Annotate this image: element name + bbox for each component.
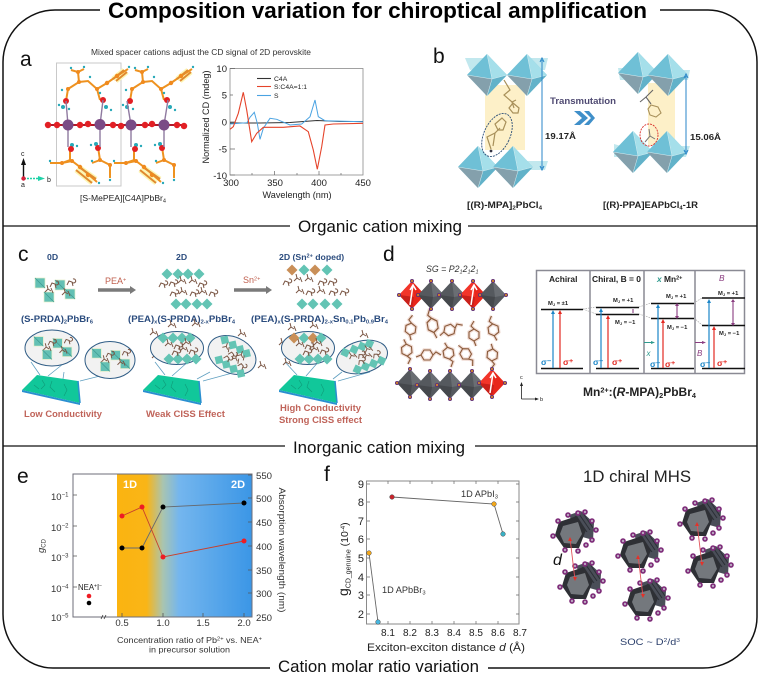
heading: organic cation mixing: Organic cation mixing (298, 217, 462, 236)
letter b: b (433, 45, 445, 68)
left distance arrow (540, 58, 544, 170)
scatter chart: (10 (339, 531, 351, 549)
stage labels (47, 252, 344, 262)
energy level diagram: B (697, 349, 703, 358)
formula Sn doped: 2-x (325, 320, 334, 326)
energy level diagram: = +1 (673, 294, 687, 300)
scatter chart: 3 (422, 590, 426, 596)
crystal axes: c (21, 151, 25, 158)
dual axis chart: 10 (51, 613, 62, 624)
right formula: 4 (679, 206, 684, 212)
space group label: 2 (462, 264, 468, 274)
scatter chart: 1D APbBr (382, 585, 422, 595)
energy level diagram: = −1 (622, 320, 636, 326)
dual axis chart: 300 (256, 589, 272, 600)
CD line chart (201, 64, 371, 201)
film schematic right (279, 321, 391, 405)
dual axis chart: −3 (62, 554, 69, 560)
formula: Mn (583, 387, 600, 399)
scatter chart: CD_genuine (346, 549, 352, 588)
axes (520, 375, 543, 403)
stage labels: 2+ (307, 254, 313, 260)
CD line chart: S (274, 93, 279, 100)
dual axis chart: 0.5 (115, 618, 129, 629)
formula 0D: 6 (90, 320, 93, 326)
film schematic middle (143, 319, 266, 405)
dual axis chart: 10 (51, 523, 62, 534)
letter e: e (17, 465, 29, 488)
left formula: [(R)-MPA] (467, 200, 508, 210)
caption high conductivity strong CISS (279, 403, 362, 425)
left structure (458, 54, 548, 188)
formula 2D: 4 (232, 320, 236, 326)
formula 0D: (S-PRDA) (21, 314, 63, 324)
dual axis chart: 2+ (217, 636, 224, 642)
right formula: -1R (683, 200, 699, 210)
structure formula: [S-MePEA][C4A]PbBr (80, 193, 162, 203)
CD line chart: 350 (267, 178, 283, 189)
Sn doped structure (283, 264, 349, 310)
PEA arrow: + (123, 278, 126, 284)
crystal structure (45, 63, 194, 186)
energy level diagram: J (671, 295, 673, 300)
formula Sn doped: 0.9 (366, 320, 374, 326)
energy level diagram: σ⁻ (700, 359, 711, 369)
Sn arrow (234, 275, 272, 294)
formula: 2 (659, 393, 663, 400)
energy level diagram: J (553, 302, 555, 307)
right distance label: 15.06Å (690, 132, 721, 142)
energy level diagram: σ⁻ (650, 359, 661, 369)
left formula: 2 (512, 206, 516, 212)
Sn arrow: Sn (243, 275, 254, 285)
formula 0D: 2 (64, 320, 67, 326)
scatter chart: ) (339, 522, 351, 526)
transmutation label: Transmutation (550, 96, 616, 106)
formula Sn doped: (S-PRDA) (281, 314, 325, 324)
space group label: 1 (460, 270, 463, 276)
dual axis chart: Concentration ratio of Pb (117, 635, 209, 645)
film schematic left (22, 330, 135, 405)
Sn arrow: 2+ (254, 276, 260, 282)
dual axis chart: 10 (51, 584, 62, 595)
right structure (613, 52, 690, 173)
scatter chart: -4 (341, 525, 347, 531)
scatter chart: 3 (495, 494, 498, 500)
MHS octahedra pairs (551, 498, 733, 621)
CD line chart: 5 (222, 90, 227, 102)
SOC equation: SOC ~ D (620, 637, 658, 648)
2D structure (159, 268, 218, 310)
left formula: PbCl (516, 200, 539, 210)
formula 2D: x (154, 320, 158, 326)
dual axis chart: in precursor solution (149, 644, 230, 654)
energy level diagram: σ⁺ (665, 359, 676, 369)
axes: c (520, 375, 523, 381)
formula Sn doped: Pb (353, 314, 366, 324)
caption high conductivity strong CISS: High Conductivity (280, 403, 362, 413)
dual axis chart: 1.0 (156, 618, 170, 629)
crystal structure (395, 279, 508, 401)
energy level diagram: M (666, 294, 671, 300)
scatter chart: 9 (358, 479, 364, 491)
right formula: [(R)-PPA]EAPbCl (603, 200, 675, 210)
energy level diagram: = +1 (620, 298, 634, 304)
left distance label: 19.17Å (545, 131, 576, 141)
energy level diagram: σ⁻ (593, 357, 604, 367)
dual axis chart: 250 (256, 613, 272, 624)
panel a caption: Mixed spacer cations adjust the CD signal of 2D perovskite (91, 48, 312, 57)
SOC equation: 3 (676, 638, 680, 644)
letter a: a (20, 48, 32, 71)
dual axis chart (36, 471, 287, 654)
stage labels: doped) (313, 252, 344, 262)
energy level diagram: J (672, 326, 674, 331)
scatter chart: Exciton-exciton distance d (Å) (367, 641, 525, 654)
formula Sn doped: 4 (385, 320, 389, 326)
dual axis chart: + (259, 636, 262, 642)
dual axis chart: − (99, 584, 102, 590)
energy level diagram: σ⁺ (563, 357, 574, 367)
energy level diagram: J (724, 332, 726, 337)
formula 2D: 2-x (201, 320, 210, 326)
dual axis chart: 1.5 (196, 618, 210, 629)
stage labels: 2D (176, 252, 187, 262)
dual axis chart: −4 (62, 584, 69, 590)
CD line chart: 300 (223, 178, 239, 189)
scatter chart (335, 479, 527, 654)
dual axis chart: 450 (256, 518, 272, 529)
energy level diagram (536, 270, 745, 374)
CD line chart: S:C4A=1:1 (274, 84, 307, 91)
CD line chart: Wavelength (nm) (262, 190, 332, 201)
CD line chart: Normalized CD (mdeg) (201, 70, 212, 164)
dual axis chart: CD (42, 538, 48, 548)
energy level diagram: M (613, 298, 618, 304)
caption high conductivity strong CISS: Strong CISS effect (279, 415, 362, 425)
CD line chart: 400 (311, 178, 327, 189)
left formula: 4 (539, 206, 543, 212)
dual axis chart: 10 (51, 492, 62, 503)
energy level diagram: Chiral, B = 0 (592, 274, 641, 284)
space group label: 1 (467, 270, 471, 276)
energy level diagram: 2+ (676, 276, 682, 282)
energy level diagram: = −1 (674, 325, 688, 331)
dual axis chart: 350 (256, 566, 272, 577)
dual axis chart: Absorption wavelength (nm) (276, 488, 287, 612)
dual axis chart: 2.0 (237, 618, 251, 629)
CD line chart: 0 (222, 118, 227, 128)
scatter chart: 1D APbI (461, 489, 495, 499)
scatter chart: 8.3 (425, 628, 439, 639)
scatter chart: 8.2 (403, 628, 417, 639)
energy level diagram: x (646, 349, 652, 358)
scatter chart: 8 (358, 497, 364, 509)
stage labels: 2D (Sn (279, 252, 307, 262)
letter f: f (324, 463, 330, 486)
formula 2D: (S-PRDA) (157, 314, 201, 324)
dual axis chart: I (97, 583, 99, 592)
energy level diagram: = ±1 (555, 301, 569, 307)
formula Sn doped: (PEA) (251, 314, 276, 324)
panel f (324, 463, 733, 654)
CD line chart: -5 (219, 144, 227, 156)
dual axis chart: 2D (231, 479, 245, 491)
dual axis chart: + (94, 584, 97, 590)
CD line chart: 10 (216, 64, 227, 75)
energy level diagram: σ⁺ (612, 357, 623, 367)
SOC equation: /d (667, 637, 676, 648)
scatter chart: g (335, 588, 351, 596)
letter d: d (383, 243, 395, 266)
scatter chart: 4 (358, 572, 364, 584)
right distance arrow (684, 74, 688, 154)
dual axis chart: 1D (123, 479, 137, 491)
structure formula: 4 (163, 198, 166, 204)
scatter chart: 8.7 (513, 628, 527, 639)
0D structure (35, 278, 76, 302)
energy level diagram: B (719, 273, 725, 283)
formula: PbBr (663, 387, 692, 399)
dual axis chart: 500 (256, 494, 272, 505)
heading: inorganic cation mixing: Inorganic cation mixing (293, 438, 465, 457)
panel d (383, 243, 745, 403)
scatter chart: 3 (358, 590, 364, 602)
CD line chart: -10 (213, 171, 227, 182)
energy level diagram: = +1 (725, 291, 739, 297)
dual axis chart: 550 (256, 471, 272, 482)
formula 0D: PbBr (67, 314, 90, 324)
caption low conductivity: Low Conductivity (24, 409, 103, 419)
panel e (17, 465, 287, 654)
scatter chart: 8.6 (491, 628, 505, 639)
formula Sn doped: x (278, 320, 282, 326)
energy level diagram: J (723, 292, 725, 297)
crystal axes: a (21, 182, 25, 189)
energy level diagram: σ⁻ (541, 357, 552, 367)
scatter chart: 8.5 (469, 628, 483, 639)
panel a (20, 48, 371, 204)
crystal axes (21, 151, 51, 189)
energy level diagram: Achiral (549, 274, 577, 284)
energy level diagram: σ⁺ (717, 358, 728, 368)
energy level diagram: M (719, 331, 724, 337)
energy level diagram: J (618, 299, 620, 304)
caption weak CISS: Weak CISS Effect (146, 409, 225, 419)
dual axis chart: NEA (78, 583, 94, 592)
dual axis chart: g (36, 548, 47, 553)
panel c (18, 243, 391, 425)
CD line chart: C4A (274, 76, 288, 83)
panel b (433, 45, 721, 212)
scatter chart: 5 (358, 553, 364, 565)
scatter chart: 8.4 (447, 628, 461, 639)
formula 2D: (PEA) (128, 314, 153, 324)
formula Sn doped: Sn (333, 314, 346, 324)
scatter chart: 8.1 (381, 628, 395, 639)
formula: R-MPA) (617, 387, 658, 399)
formula Sn doped: 0.1 (345, 320, 353, 326)
PEA arrow: PEA (105, 276, 123, 286)
formula Sn doped: Br (374, 314, 385, 324)
letter c: c (18, 243, 28, 266)
dual axis chart: vs. NEA (224, 635, 259, 645)
CD line chart: 450 (355, 178, 371, 189)
energy level diagram: M (718, 291, 723, 297)
formula: 4 (692, 393, 696, 400)
chevron arrow (574, 111, 595, 125)
formula: 2+ (600, 388, 609, 394)
energy level diagram: x Mn (657, 274, 676, 284)
space group label: 2 (470, 264, 476, 274)
MHS heading: 1D chiral MHS (583, 468, 691, 486)
SOC equation: 2 (664, 638, 667, 644)
formula 2D: PbBr (209, 314, 232, 324)
crystal axes: b (47, 177, 51, 184)
dual axis chart: 400 (256, 542, 272, 553)
energy level diagram: M (667, 325, 672, 331)
dual axis chart: 10 (51, 553, 62, 564)
space group label: 1 (475, 270, 478, 276)
scatter chart: 6 (358, 534, 364, 546)
space group label: SG = P2 (426, 264, 460, 274)
formula: :( (609, 387, 617, 399)
dual axis chart: −2 (62, 524, 69, 530)
energy level diagram: M (615, 320, 620, 326)
scatter chart: 2 (358, 609, 364, 621)
stage labels: 0D (47, 252, 58, 262)
dual axis chart: −5 (62, 614, 69, 620)
d label: d (553, 552, 563, 569)
dual axis chart: −1 (62, 492, 69, 498)
energy level diagram: M (548, 301, 553, 307)
scatter chart: 7 (358, 516, 364, 528)
energy level diagram: = −1 (726, 331, 740, 337)
PEA arrow (98, 276, 136, 294)
energy level diagram: J (620, 321, 622, 326)
axes: b (540, 397, 543, 403)
